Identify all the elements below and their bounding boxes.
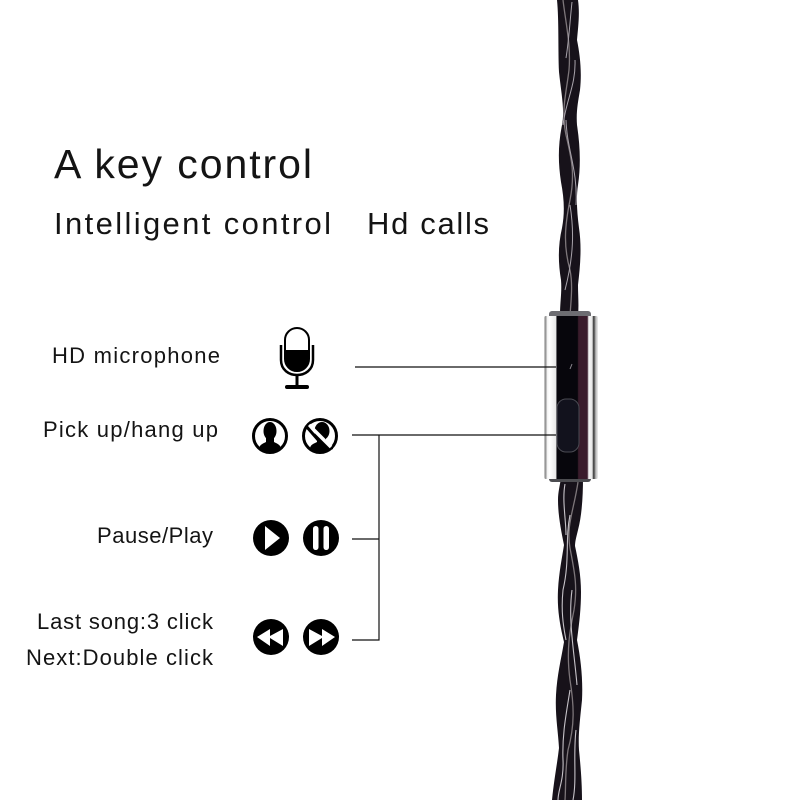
lower cable (552, 478, 583, 800)
cable (552, 0, 583, 800)
subtitle: hd calls: Hd calls (367, 206, 489, 241)
remote button (557, 399, 579, 452)
icon: play (253, 520, 289, 556)
icon: fast forward (303, 619, 339, 655)
upper cable (557, 0, 581, 316)
icon: microphone (281, 328, 313, 389)
icon: rewind (253, 619, 289, 655)
connector: control bracket (352, 435, 556, 640)
label: pause/play: Pause/Play (97, 523, 213, 548)
connector: microphone line (355, 366, 556, 368)
remote collars (549, 311, 591, 319)
icon: hang up (304, 420, 336, 452)
label: next: Next:Double click (26, 645, 214, 670)
icon: pick up (254, 420, 286, 452)
label: last song: Last song:3 click (37, 609, 214, 634)
label: HD microphone: HD microphone (52, 343, 220, 368)
title: A key control (54, 141, 312, 187)
inline remote control (544, 311, 598, 482)
label: pick up/hang up: Pick up/hang up (43, 417, 218, 442)
remote body (544, 316, 598, 479)
icon: pause (303, 520, 339, 556)
subtitle: intelligent control: Intelligent control (54, 206, 331, 241)
microphone hole (570, 364, 572, 369)
